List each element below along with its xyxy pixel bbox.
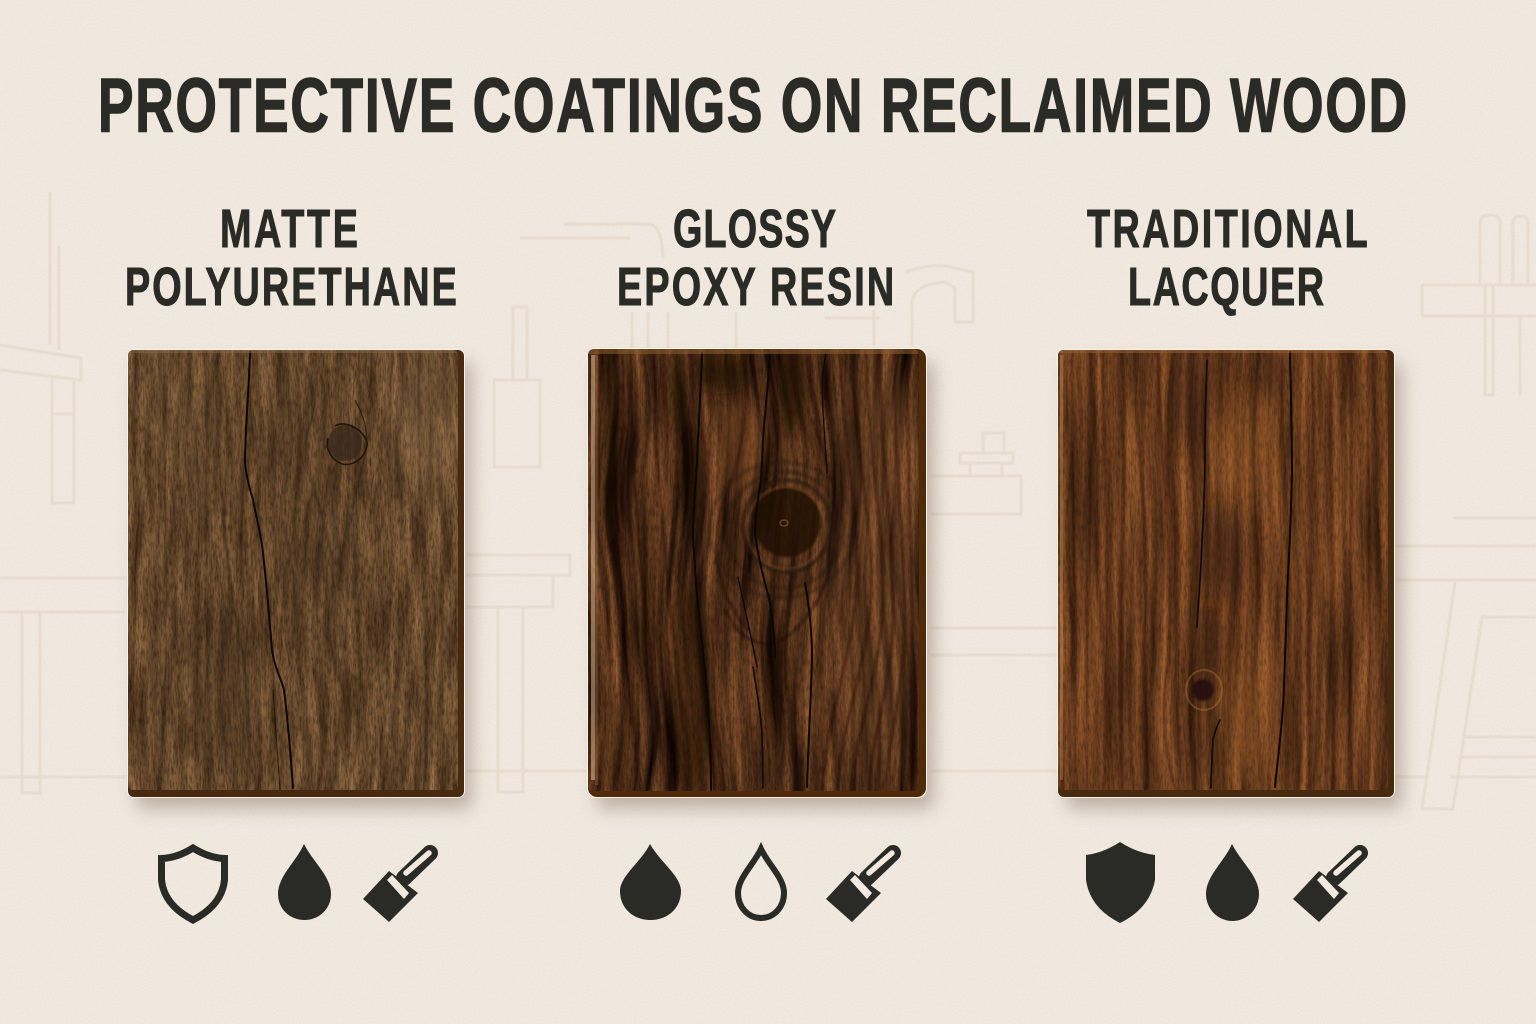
icon: filled drop <box>1206 844 1259 921</box>
grain lines <box>611 352 913 790</box>
heading: traditional lacquer <box>1087 198 1368 317</box>
title: PROTECTIVE COATINGS ON RECLAIMED WOOD <box>98 63 1407 148</box>
icon: large filled drop <box>620 844 681 920</box>
icons: matte polyurethane <box>162 844 430 922</box>
icon: paint brush <box>363 853 430 922</box>
heading: glossy epoxy resin: GLOSSY <box>673 198 836 259</box>
icons: glossy epoxy resin <box>620 844 893 922</box>
icon: paint brush <box>826 853 893 922</box>
heading: matte polyurethane: MATTE <box>220 198 358 259</box>
icon: filled shield <box>1086 842 1155 923</box>
knot <box>327 400 367 464</box>
heading: glossy epoxy resin: EPOXY RESIN <box>617 256 894 317</box>
icons: traditional lacquer <box>1086 842 1360 923</box>
heading: traditional lacquer: TRADITIONAL <box>1087 198 1368 259</box>
panel: glossy epoxy resin wood sample <box>586 348 944 818</box>
icon: paint brush <box>1293 853 1360 922</box>
knot <box>1186 670 1222 710</box>
dark patches <box>596 320 808 800</box>
background: faint workshop line drawing <box>0 192 1536 809</box>
cracks <box>693 353 827 790</box>
panel: matte polyurethane wood sample <box>126 349 482 818</box>
tonal patches <box>1169 335 1288 780</box>
heading: glossy epoxy resin <box>617 198 894 317</box>
cracks <box>245 352 293 790</box>
knot <box>710 462 854 598</box>
heading: matte polyurethane: POLYURETHANE <box>125 256 457 317</box>
heading: matte polyurethane <box>125 198 457 317</box>
cracks <box>1197 352 1292 788</box>
icon: outline shield <box>162 848 224 920</box>
icon: filled drop <box>278 844 331 920</box>
panel: traditional lacquer wood sample <box>1056 349 1412 818</box>
icon: outline drop <box>738 849 784 918</box>
heading: traditional lacquer: LACQUER <box>1128 256 1324 317</box>
